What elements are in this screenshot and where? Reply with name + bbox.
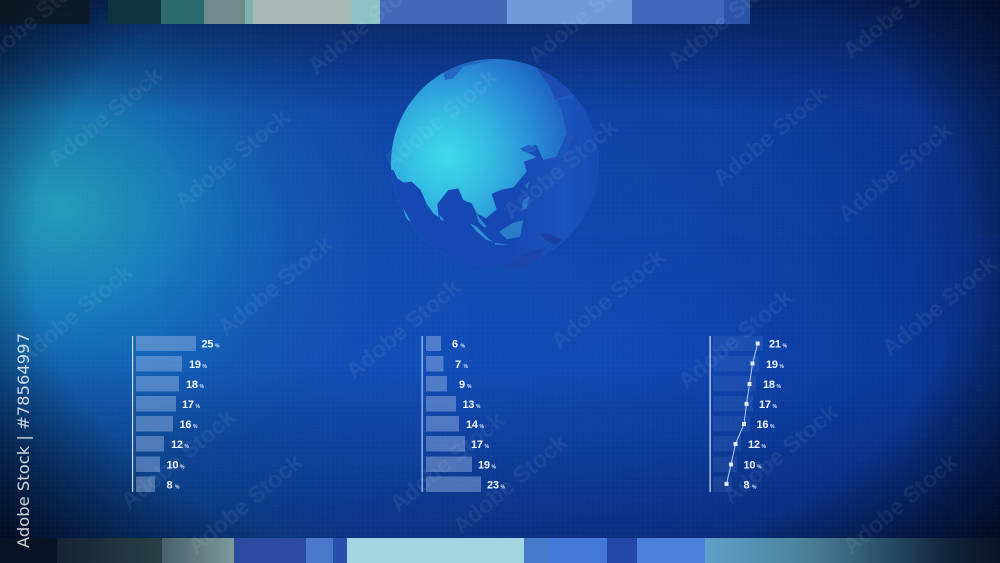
bar 9% xyxy=(426,376,472,392)
markers xyxy=(724,342,760,486)
bar 10%: % xyxy=(180,464,185,470)
bar 25% xyxy=(136,336,220,351)
bar 16% xyxy=(136,416,198,432)
watermarks: Adobe Stock xyxy=(546,244,670,354)
value labels: % xyxy=(776,384,782,390)
watermarks: Adobe Stock xyxy=(116,404,240,514)
chart 2: bars xyxy=(422,336,506,492)
bar 23%: % xyxy=(500,484,506,490)
value labels: 16 xyxy=(756,419,768,431)
bar 8%: % xyxy=(175,484,180,490)
bar 19% xyxy=(426,456,496,472)
watermarks: Adobe Stock xyxy=(718,399,842,509)
bar 7%: 7 xyxy=(455,359,461,371)
bar 17%: 17 xyxy=(471,439,483,451)
line series xyxy=(726,344,758,484)
bar 14% xyxy=(426,416,484,432)
value labels: 17 xyxy=(759,399,771,411)
bar 7%: % xyxy=(464,364,468,370)
globe xyxy=(391,59,599,268)
top colour band xyxy=(0,0,750,24)
watermarks: Adobe Stock xyxy=(833,117,957,227)
bar 12%: % xyxy=(184,444,190,450)
value labels: 10 xyxy=(744,460,755,472)
value labels: % xyxy=(782,344,788,350)
bar 23% xyxy=(426,476,506,492)
bar 17% xyxy=(136,396,200,412)
bar 16%: % xyxy=(193,424,198,430)
watermarks: Adobe Stock xyxy=(183,449,307,559)
bar 13%: 13 xyxy=(462,399,474,411)
watermarks: Adobe Stock xyxy=(213,231,337,341)
watermarks: Adobe Stock xyxy=(341,274,465,384)
bar 6%: % xyxy=(460,344,466,350)
bar 19% xyxy=(136,356,208,372)
value labels: % xyxy=(752,484,757,490)
chart 3: line over faint bars xyxy=(710,336,788,492)
value labels: 19 xyxy=(766,359,778,371)
bar 9%: 9 xyxy=(459,379,465,391)
australia xyxy=(504,247,545,268)
bottom colour band xyxy=(0,538,1000,563)
value labels xyxy=(744,338,788,492)
bar 16%: 16 xyxy=(180,419,191,431)
value labels: % xyxy=(780,364,784,370)
value labels: 8 xyxy=(744,480,750,492)
value labels: 21 xyxy=(769,338,781,350)
bar 19%: % xyxy=(492,464,496,470)
bar 17%: % xyxy=(484,444,490,450)
watermarks: Adobe Stock xyxy=(877,251,1000,361)
value labels: % xyxy=(762,444,766,450)
watermarks: Adobe Stock xyxy=(838,449,962,559)
bar 17%: % xyxy=(196,404,200,410)
bar 19%: 19 xyxy=(189,359,201,371)
side credit: Adobe Stock | #78564997 xyxy=(14,333,33,548)
bar 10% xyxy=(136,456,185,472)
chart 1: bars xyxy=(132,336,220,492)
bar 7% xyxy=(426,356,468,372)
watermarks: Adobe Stock xyxy=(385,407,509,517)
bar 6%: 6 xyxy=(452,338,458,350)
landmasses in lighter tone xyxy=(470,223,493,242)
bar 17% xyxy=(426,436,490,452)
watermarks: Adobe Stock xyxy=(13,259,137,369)
bar 25%: % xyxy=(215,344,220,350)
new guinea xyxy=(539,233,563,245)
bar 9%: % xyxy=(467,384,472,390)
bar 14%: 14 xyxy=(466,419,479,431)
bar 14%: % xyxy=(480,424,484,430)
watermarks: Adobe Stock xyxy=(448,429,572,539)
ocean and coastlines xyxy=(391,60,588,267)
bar 13% xyxy=(426,396,481,412)
watermarks: Adobe Stock xyxy=(170,104,294,214)
bar 12%: 12 xyxy=(171,439,183,451)
value labels: % xyxy=(772,404,778,410)
bar 13%: % xyxy=(476,404,481,410)
watermarks: Adobe Stock xyxy=(673,284,797,394)
value labels: % xyxy=(770,424,775,430)
watermarks: Adobe Stock xyxy=(378,64,502,174)
bar 12% xyxy=(136,436,190,452)
bar 8%: 8 xyxy=(166,480,172,492)
bar 18% xyxy=(136,376,204,392)
bar 19%: % xyxy=(202,364,208,370)
value labels: 12 xyxy=(748,439,760,451)
bar 8% xyxy=(136,476,180,492)
watermarks: Adobe Stock xyxy=(708,81,832,191)
bar 10%: 10 xyxy=(166,460,178,472)
bar 17%: 17 xyxy=(182,399,194,411)
bar 18%: % xyxy=(200,384,204,390)
bar 23%: 23 xyxy=(487,480,499,492)
bar 18%: 18 xyxy=(186,379,198,391)
watermarks: Adobe Stock xyxy=(43,62,167,172)
watermarks: Adobe Stock xyxy=(498,114,622,224)
bar 19%: 19 xyxy=(478,460,490,472)
bar 6% xyxy=(426,336,466,351)
bar 25%: 25 xyxy=(202,338,213,350)
value labels: % xyxy=(757,464,762,470)
value labels: 18 xyxy=(763,379,775,391)
